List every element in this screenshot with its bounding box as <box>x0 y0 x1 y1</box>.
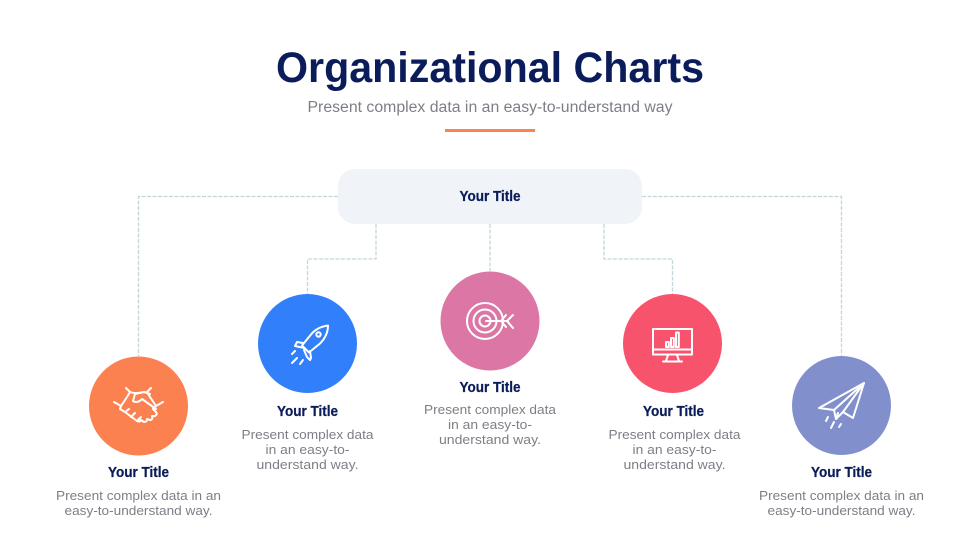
top node: root title box: Your Title <box>460 189 520 205</box>
dashed connector lines <box>138 196 842 356</box>
title: Organizational Charts <box>276 44 704 92</box>
node title: Your Title <box>811 465 872 481</box>
pink circle <box>440 272 540 370</box>
icon: target <box>467 303 513 339</box>
node description <box>242 427 374 472</box>
icon: paper plane <box>819 383 864 428</box>
node title: Your Title <box>460 380 520 396</box>
icon: monitor with bars <box>653 329 692 362</box>
top node: root title box <box>338 169 642 224</box>
icon: handshake <box>114 388 163 422</box>
node title: Your Title <box>643 404 704 420</box>
node 1: handshake <box>56 356 221 518</box>
node 2: rocket <box>242 294 374 472</box>
node description: Present complex data <box>608 427 741 442</box>
periwinkle circle <box>792 356 891 455</box>
node description: Present complex data <box>242 427 374 442</box>
icon: rocket <box>292 326 328 364</box>
node description: in an easy-to- <box>448 417 532 432</box>
node description: easy-to-understand way. <box>64 503 212 518</box>
node description: understand way. <box>439 432 541 447</box>
node description: Present complex data <box>424 402 557 417</box>
node description <box>759 488 924 518</box>
title underline accent <box>445 129 535 132</box>
node description: in an easy-to- <box>632 442 716 457</box>
node description <box>424 402 557 447</box>
node description: Present complex data in an <box>759 488 924 503</box>
blue circle <box>258 294 357 393</box>
node description: easy-to-understand way. <box>768 503 916 518</box>
node 5: paper plane <box>759 356 924 518</box>
node 3: target <box>424 272 557 447</box>
node description: in an easy-to- <box>266 442 350 457</box>
node 4: monitor chart <box>608 294 741 472</box>
node description: Present complex data in an <box>56 488 221 503</box>
node description <box>608 427 741 472</box>
orange circle <box>89 356 188 456</box>
node title: Your Title <box>277 404 338 420</box>
node title: Your Title <box>108 465 169 481</box>
node description: understand way. <box>624 457 726 472</box>
node description <box>56 488 221 518</box>
subtitle: Present complex data in an easy-to-understand way <box>308 99 673 116</box>
node description: understand way. <box>256 457 358 472</box>
red circle <box>623 294 722 393</box>
